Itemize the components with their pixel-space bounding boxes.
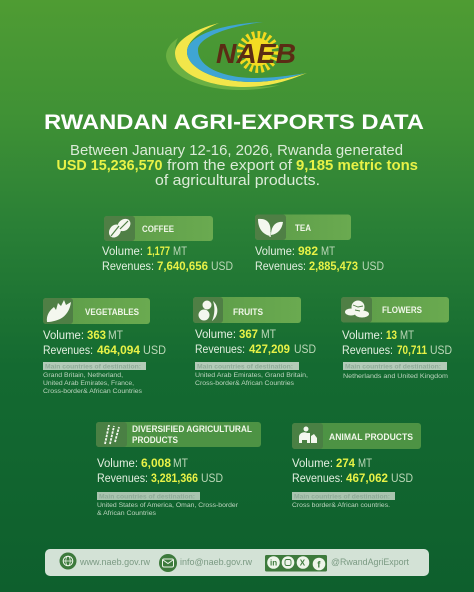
diversified destinations <box>97 492 239 517</box>
vegetables volume: 363 <box>87 330 106 342</box>
fruits destinations: United Arab Emirates, Grand Britain, <box>195 372 308 379</box>
flowers volume: Volume: <box>342 330 383 342</box>
panel: fruits <box>193 297 316 387</box>
vegetables volume <box>43 330 123 342</box>
icon: coffee beans <box>106 216 133 240</box>
flowers revenues: Revenues: <box>342 345 393 357</box>
diversified revenues <box>97 473 223 485</box>
vegetables banner: VEGETABLES <box>85 307 139 317</box>
icon: wheat <box>105 425 119 444</box>
panel: diversified agricultural products <box>96 422 261 517</box>
website: www.naeb.gov.rw <box>79 557 150 568</box>
vegetables destinations: Main countries of destination: <box>45 363 141 370</box>
diversified revenues: USD <box>201 473 223 485</box>
fruits volume: Volume: <box>195 329 236 341</box>
flowers destinations: Main countries of destination: <box>345 363 441 370</box>
flowers revenues <box>342 345 452 357</box>
panel: animal products <box>292 423 421 509</box>
coffee volume: MT <box>173 246 187 258</box>
tea volume <box>255 246 335 258</box>
coffee volume: 1,177 <box>147 246 170 258</box>
vegetables revenues: 464,094 <box>97 345 141 357</box>
flowers volume: MT <box>400 330 414 342</box>
diversified destinations: Main countries of destination: <box>99 493 195 500</box>
tea revenues: 2,885,473 <box>309 261 358 273</box>
panel: tea <box>255 214 384 273</box>
tea volume: Volume: <box>255 246 295 258</box>
social handle: @RwandAgriExport <box>331 557 409 568</box>
flowers volume <box>342 330 414 342</box>
intro paragraph: from the export of <box>167 158 293 174</box>
NAEB logo <box>166 22 307 90</box>
icon: vegetables <box>47 300 71 322</box>
flowers revenues: 70,711 <box>397 345 428 357</box>
animal products revenues <box>292 473 413 485</box>
coffee revenues: Revenues: <box>102 261 154 273</box>
flowers banner: FLOWERS <box>382 305 422 315</box>
diversified banner <box>96 422 261 447</box>
tea volume: 982 <box>298 246 318 258</box>
icon: animals <box>299 426 317 443</box>
diversified destinations: United States of America, Oman, Cross-border <box>97 502 239 509</box>
coffee revenues: 7,640,656 <box>157 261 208 273</box>
diversified revenues: Revenues: <box>97 473 148 485</box>
fruits revenues: USD <box>294 344 316 356</box>
fruits revenues: 427,209 <box>249 344 290 356</box>
animal products banner: ANIMAL PRODUCTS <box>329 432 413 442</box>
fruits volume: MT <box>261 329 276 341</box>
animal products revenues: USD <box>391 473 413 485</box>
vegetables revenues: USD <box>143 345 166 357</box>
fruits destinations: Cross-border& African Countries <box>195 380 295 387</box>
panel: flowers <box>341 297 452 380</box>
vegetables volume: Volume: <box>43 330 84 342</box>
coffee volume: Volume: <box>102 246 143 258</box>
vegetables destinations: Cross-border& African Countries <box>43 388 143 395</box>
animal products volume: MT <box>358 458 372 470</box>
icon: tea leaves <box>258 219 283 237</box>
social icons: in <box>270 558 277 568</box>
diversified volume: MT <box>173 458 188 470</box>
icon: fruits <box>198 300 217 321</box>
intro paragraph: 9,185 metric tons <box>296 158 418 174</box>
diversified revenues: 3,281,366 <box>151 473 198 485</box>
animal products volume <box>292 458 372 470</box>
fruits volume <box>195 329 276 341</box>
animal products destinations <box>292 492 395 509</box>
icon: mail <box>159 554 177 572</box>
vegetables revenues <box>43 345 166 357</box>
flowers revenues: USD <box>430 345 452 357</box>
fruits destinations <box>195 362 308 387</box>
fruits banner: FRUITS <box>233 307 263 317</box>
tea revenues: USD <box>362 261 384 273</box>
diversified volume: Volume: <box>97 458 138 470</box>
animal products revenues: Revenues: <box>292 473 343 485</box>
diversified banner: PRODUCTS <box>132 435 178 445</box>
NAEB logo: NAEB <box>216 38 296 69</box>
footer contact bar <box>45 549 429 576</box>
coffee volume <box>102 246 187 258</box>
icon: globe <box>60 552 76 570</box>
fruits destinations: Main countries of destination: <box>197 363 293 370</box>
tea volume: MT <box>321 246 335 258</box>
vegetables destinations: Grand Britain, Netherland, <box>43 372 123 379</box>
vegetables volume: MT <box>108 330 123 342</box>
animal products destinations: Cross border& African countries. <box>292 502 390 509</box>
animal products volume: 274 <box>336 458 356 470</box>
flowers volume: 13 <box>386 330 397 342</box>
animal products volume: Volume: <box>292 458 333 470</box>
fruits volume: 367 <box>239 329 258 341</box>
email: info@naeb.gov.rw <box>180 557 252 568</box>
intro paragraph: Between January 12-16, 2026, Rwanda generated <box>70 143 403 159</box>
animal products revenues: 467,062 <box>346 473 388 485</box>
social icons <box>265 555 327 572</box>
diversified banner: DIVERSIFIED AGRICULTURAL <box>132 424 252 434</box>
tea banner: TEA <box>295 223 311 233</box>
panel: vegetables <box>43 298 166 395</box>
social icons: f <box>317 560 321 570</box>
diversified volume: 6,008 <box>141 458 172 470</box>
fruits revenues <box>195 344 316 356</box>
coffee revenues: USD <box>211 261 233 273</box>
panel: coffee <box>102 216 233 273</box>
icon: flower <box>345 300 369 318</box>
fruits revenues: Revenues: <box>195 344 245 356</box>
social icons: X <box>300 558 306 568</box>
tea revenues: Revenues: <box>255 261 306 273</box>
animal products destinations: Main countries of destination: <box>294 493 390 500</box>
vegetables destinations <box>43 362 146 395</box>
tea revenues <box>255 261 384 273</box>
intro paragraph: of agricultural products. <box>155 173 320 189</box>
intro paragraph <box>56 143 418 189</box>
vegetables revenues: Revenues: <box>43 345 93 357</box>
title: RWANDAN AGRI-EXPORTS DATA <box>44 111 424 134</box>
coffee revenues <box>102 261 233 273</box>
diversified volume <box>97 458 188 470</box>
coffee banner: COFFEE <box>142 224 174 234</box>
diversified destinations: & African Countries <box>97 510 157 517</box>
vegetables destinations: United Arab Emirates, France, <box>43 380 134 387</box>
flowers destinations <box>343 362 448 380</box>
intro paragraph: USD 15,236,570 <box>56 158 162 174</box>
flowers destinations: Netherlands and United Kingdom <box>343 373 448 380</box>
